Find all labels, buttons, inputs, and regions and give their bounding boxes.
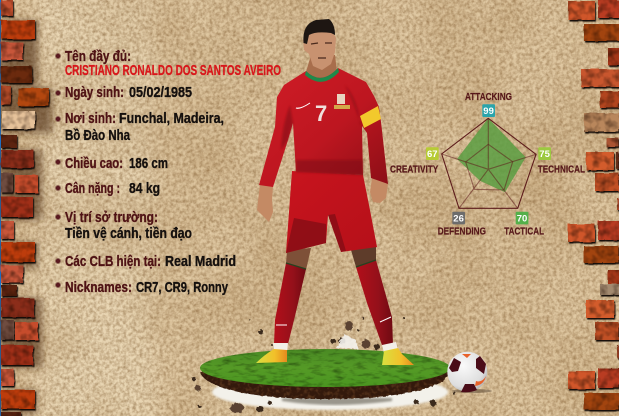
- right knee: [351, 246, 376, 267]
- weight: 84 kg: [129, 180, 160, 197]
- technical label and score: 75: [539, 149, 551, 160]
- white debris: [336, 334, 358, 349]
- left leg sock: [274, 263, 306, 344]
- grass platform: [192, 317, 456, 413]
- tactical label and score: 70: [517, 214, 527, 225]
- right hand: [370, 178, 388, 203]
- height: 186 cm: [129, 155, 168, 172]
- left hand: [257, 184, 273, 222]
- sock bands and ticks: [286, 260, 376, 269]
- shorts: [286, 171, 377, 253]
- jersey shading: [281, 85, 363, 175]
- birthplace line 2: Bồ Đào Nha: [65, 127, 130, 144]
- left boot: [256, 349, 287, 363]
- technical label and score: TECHNICAL: [538, 164, 585, 176]
- grass top: [200, 349, 450, 387]
- jersey: [259, 68, 388, 187]
- attacking label and score: ATTACKING: [465, 91, 512, 103]
- date of birth: 05/02/1985: [129, 84, 192, 101]
- defending label and score: [438, 212, 486, 238]
- facial features: [311, 43, 332, 58]
- white socks: [273, 342, 398, 353]
- shirt number: 7: [315, 101, 327, 126]
- crest: [334, 94, 350, 109]
- captain armband: [360, 106, 381, 128]
- nicknames: Nicknames:: [65, 279, 132, 296]
- tactical label and score: [504, 212, 544, 238]
- tactical label and score: TACTICAL: [504, 226, 544, 238]
- radar chart: [390, 91, 585, 238]
- position label: Vị trí sở trường:: [65, 209, 158, 226]
- birthplace line 1: Funchal, Madeira,: [119, 110, 224, 127]
- current club: Real Madrid: [165, 253, 236, 270]
- right brick wall: [568, 0, 619, 410]
- soil edge: [200, 372, 450, 399]
- right leg sock: [356, 260, 393, 345]
- face: [303, 30, 336, 70]
- full name value: CRISTIANO RONALDO DOS SANTOS AVEIRO: [65, 62, 281, 79]
- creativity label and score: [390, 147, 439, 176]
- right boot: [382, 348, 414, 365]
- birthplace line 1: Nơi sinh:: [65, 110, 116, 127]
- defending label and score: DEFENDING: [438, 226, 486, 238]
- neck: [306, 55, 337, 82]
- shorts shadow: [286, 214, 346, 253]
- radar data area: [457, 118, 526, 192]
- player biography list: [55, 48, 281, 296]
- football player: [256, 19, 414, 365]
- full name label: Tên đầy đủ:: [65, 48, 131, 65]
- hair: [303, 19, 335, 44]
- current club: Các CLB hiện tại:: [65, 253, 161, 270]
- soil scatter: [192, 317, 456, 413]
- platform shadow: [212, 374, 448, 410]
- nike logo: [296, 103, 310, 108]
- weight: Cân nặng :: [65, 180, 120, 197]
- attacking label and score: 99: [483, 106, 494, 117]
- defending label and score: 26: [453, 214, 464, 225]
- radar grid: [442, 118, 536, 208]
- left knee: [286, 248, 311, 270]
- attacking label and score: [465, 91, 512, 117]
- creativity label and score: 67: [427, 149, 438, 160]
- position value: Tiền vệ cánh, tiền đạo: [65, 225, 192, 242]
- date of birth: Ngày sinh:: [65, 84, 124, 101]
- height: Chiều cao:: [65, 155, 123, 172]
- collar: [305, 68, 339, 82]
- nicknames: CR7, CR9, Ronny: [136, 279, 228, 296]
- football: [447, 352, 492, 393]
- technical label and score: [538, 147, 585, 176]
- creativity label and score: CREATIVITY: [390, 164, 438, 176]
- bullets: [55, 53, 61, 288]
- left brick wall: [0, 0, 52, 416]
